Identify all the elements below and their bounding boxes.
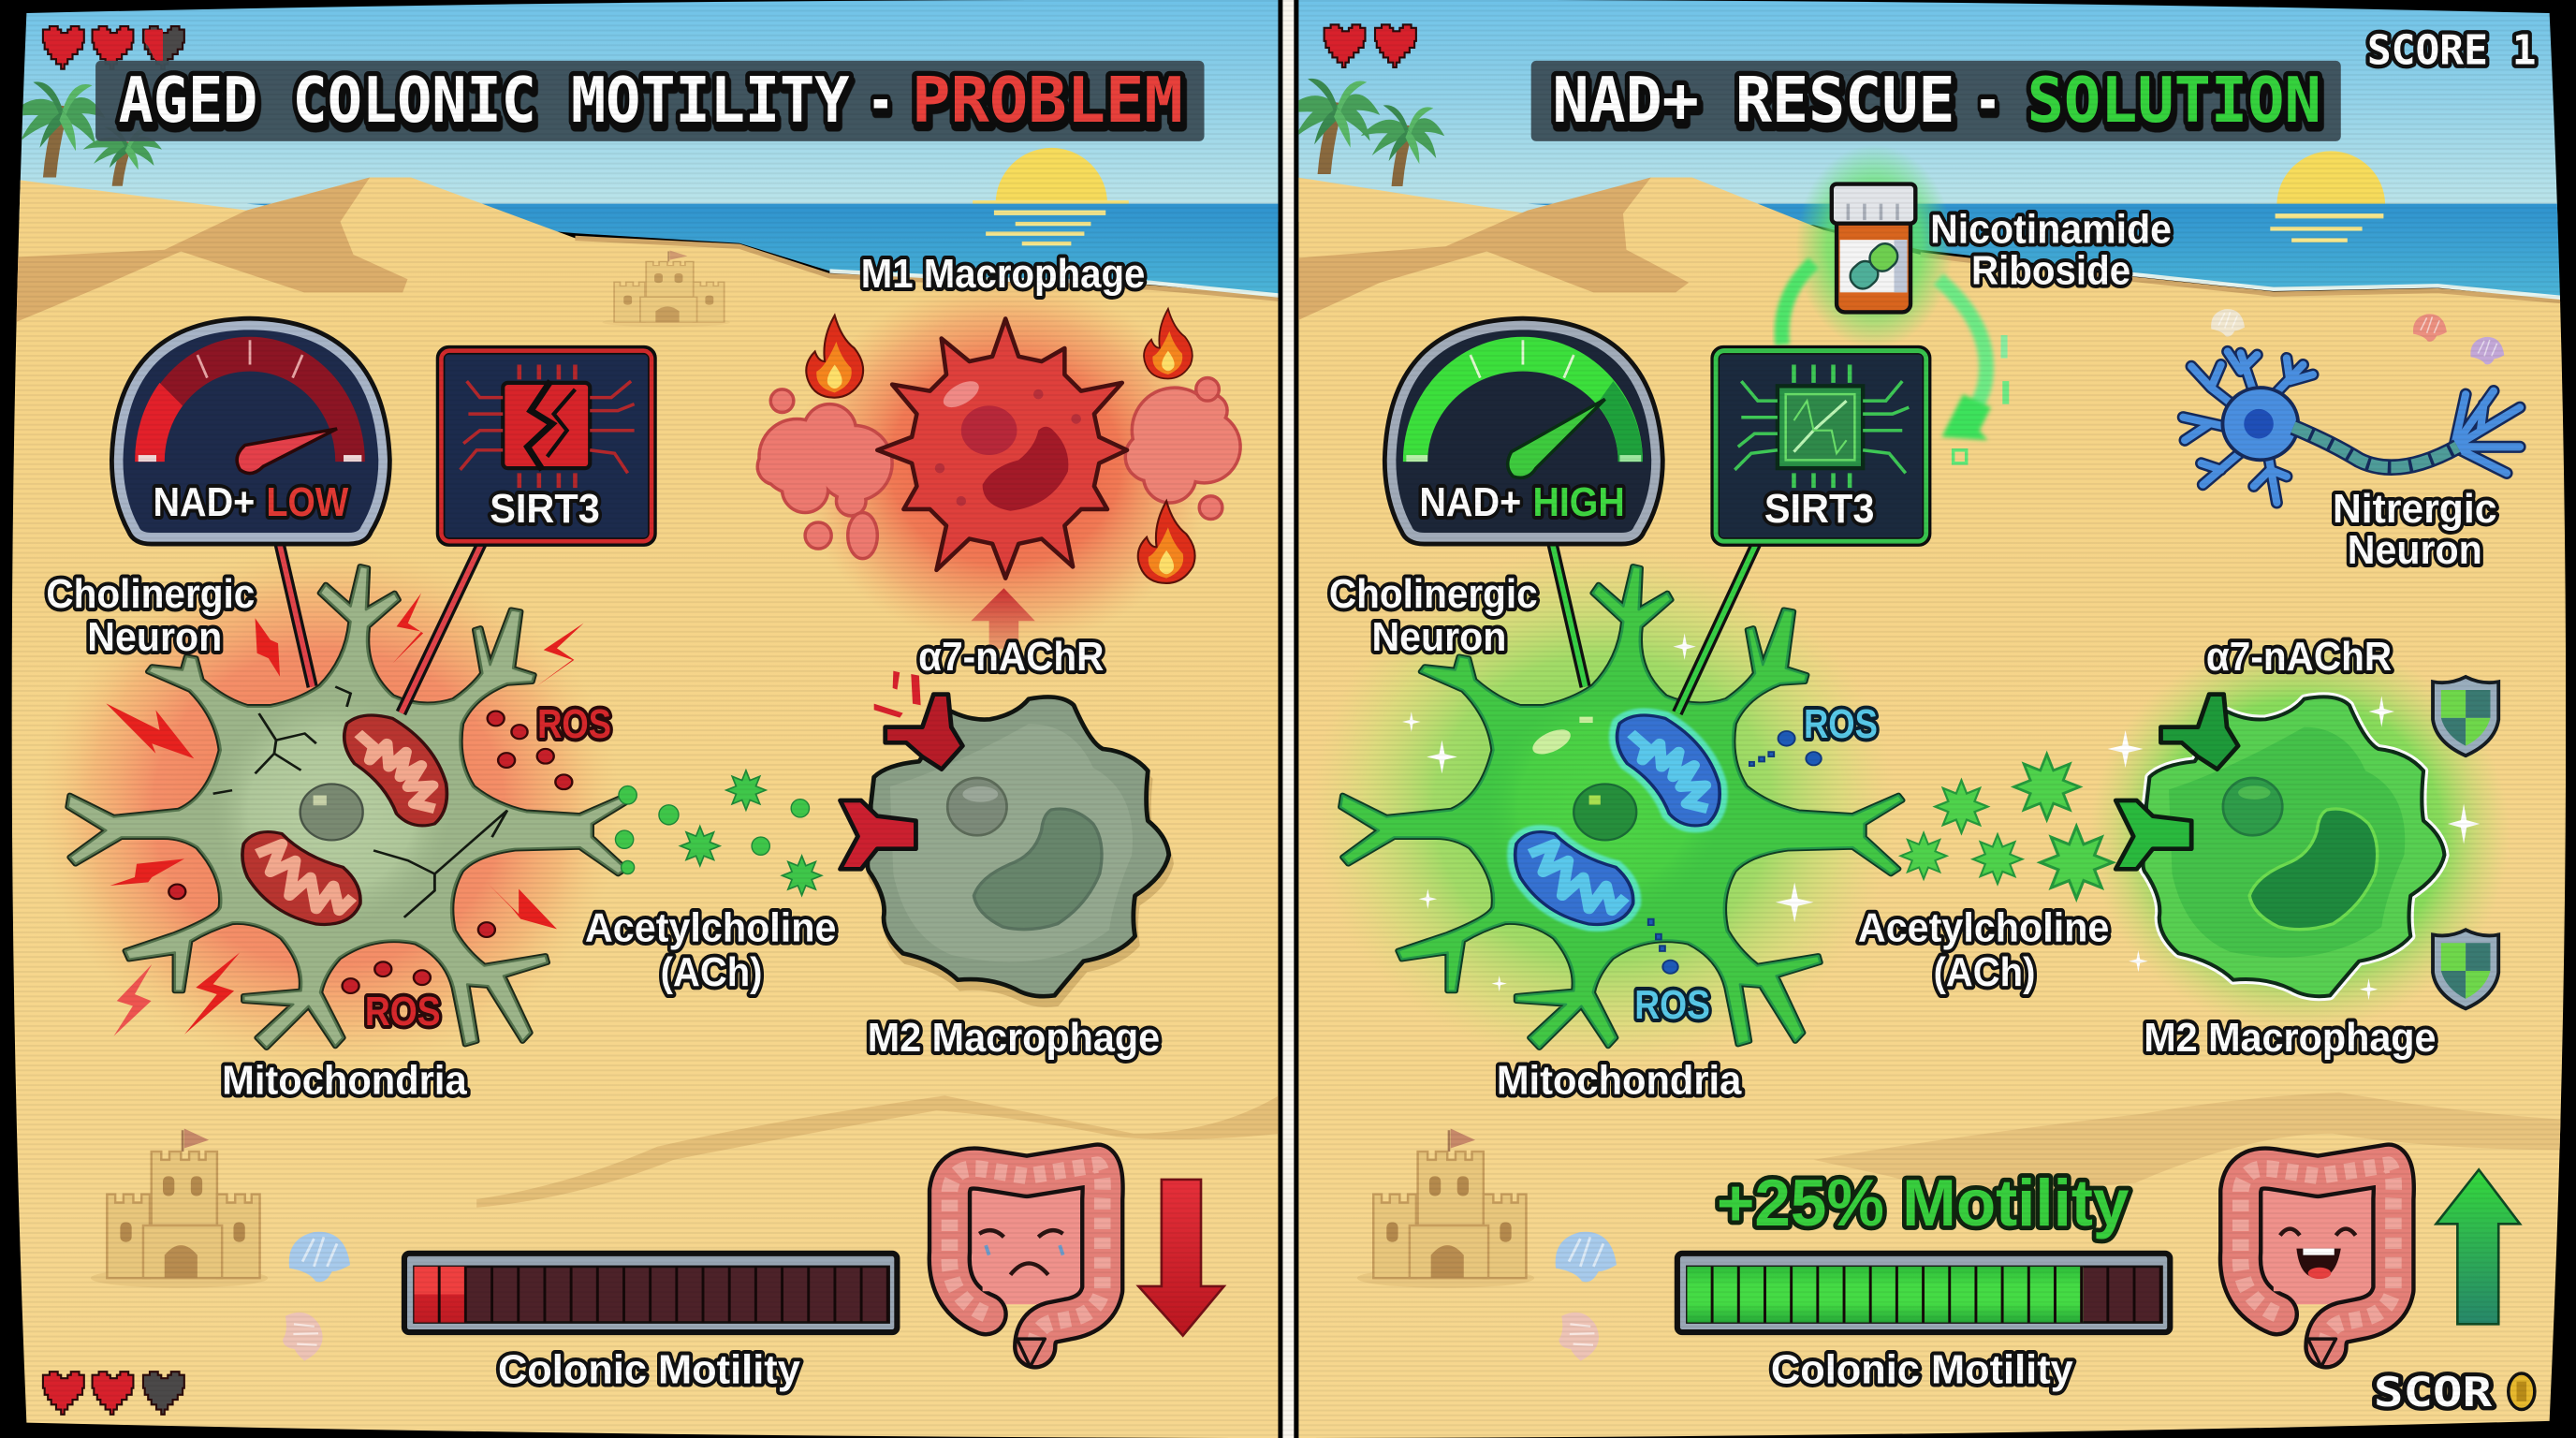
label: ROS upper: ROS — [1804, 701, 1878, 747]
soma — [2222, 388, 2298, 460]
swirl left — [1782, 263, 1814, 345]
healthy cholinergic neuron — [1340, 566, 1902, 1048]
connector: NAD+ gauge to neuron — [1553, 544, 1586, 686]
bar fill — [414, 1267, 467, 1323]
gauge text: NAD+ — [153, 479, 255, 525]
gauge: NAD+ low — [119, 325, 383, 537]
title text: NAD+ RESCUE — [1553, 64, 1954, 137]
M2 macrophage, healthy green — [2108, 695, 2480, 1000]
chip — [1778, 386, 1863, 468]
sandcastle — [91, 1128, 268, 1288]
colon tube — [2240, 1165, 2393, 1367]
gauge needle — [237, 429, 337, 474]
label: Cholinergic Neuron: Neuron — [87, 614, 222, 660]
gauge text — [153, 479, 349, 525]
label: Nitrergic Neuron: Nitrergic — [2333, 486, 2496, 532]
title text: AGED COLONIC MOTILITY — [119, 64, 849, 137]
label: M2 Macrophage: M2 Macrophage — [868, 1015, 1160, 1061]
cracks — [213, 686, 507, 917]
label: Colonic Motility: Colonic Motility — [1771, 1346, 2073, 1392]
gauge band — [1403, 337, 1643, 462]
cell body — [868, 697, 1171, 1005]
title text — [1553, 64, 2321, 137]
label: Nitrergic Neuron: Neuron — [2348, 527, 2482, 573]
title text: SOLUTION — [2027, 64, 2321, 137]
label: Mitochondria: Mitochondria — [222, 1058, 467, 1104]
shell: blue — [1556, 1232, 1617, 1282]
title bar: solution — [1531, 61, 2341, 141]
SIRT3 healthy chip card — [1715, 350, 1927, 542]
card — [1715, 350, 1927, 542]
sun — [973, 148, 1129, 204]
sand — [0, 178, 1281, 1438]
sparkles — [1402, 633, 1814, 991]
label: Colonic Motility: Colonic Motility — [498, 1346, 800, 1392]
hearts: top right panel — [1325, 24, 1416, 67]
hearts: bottom left — [43, 1372, 184, 1415]
broken chip — [503, 381, 590, 470]
colon face — [963, 1186, 1090, 1304]
neuron body — [1340, 566, 1902, 1048]
receptor top — [886, 695, 962, 770]
label: Nicotinamide Riboside — [1930, 207, 2172, 294]
mitochondrion lower — [1515, 832, 1633, 924]
lower dune streak — [476, 1094, 1281, 1208]
gauge rim — [119, 325, 383, 537]
lower dune — [1814, 1093, 2576, 1190]
M1 glow — [816, 292, 1200, 635]
ROS dots — [168, 712, 572, 993]
label: Cholinergic Neuron — [46, 571, 255, 660]
label: alpha7 receptor: α7-nAChR — [2206, 634, 2392, 680]
supplement bottle with swirl — [1782, 144, 2009, 463]
title text: PROBLEM — [912, 64, 1183, 137]
sand — [1298, 178, 2576, 1438]
label: Nicotinamide Riboside: Nicotinamide — [1930, 207, 2172, 253]
bar segments — [1687, 1267, 2162, 1323]
label: Acetylcholine — [585, 904, 836, 995]
gauge needle — [1508, 399, 1605, 477]
shoreline foam and wet sand — [1921, 255, 2576, 302]
neuron halo — [1311, 546, 1895, 1071]
panel: solution (right) — [1281, 0, 2576, 1438]
label: Acetylcholine: Acetylcholine — [585, 904, 836, 950]
label: Mitochondria: Mitochondria — [1497, 1058, 1742, 1104]
label: ROS lower: ROS — [1634, 982, 1710, 1028]
bar fill — [1687, 1267, 2083, 1323]
small distant sandcastle — [603, 251, 730, 327]
HUD: SCORE 1: SCORE 1 — [2367, 26, 2537, 74]
macrophage halo — [2089, 638, 2510, 1032]
bar frame — [1677, 1254, 2170, 1332]
neuron body — [68, 566, 630, 1048]
bottle body — [1837, 217, 1910, 312]
bottle cap — [1832, 184, 1915, 224]
gauge rim — [1392, 325, 1656, 537]
capsule — [1846, 239, 1902, 293]
acetylcholine particles — [615, 770, 822, 895]
receptor left — [841, 800, 915, 869]
colon tube — [949, 1165, 1103, 1367]
flames — [806, 309, 1195, 583]
nucleus — [300, 784, 363, 840]
label: alpha7 receptor: α7-nAChR — [918, 634, 1104, 680]
acetylcholine particles — [1901, 754, 2113, 899]
nucleolus — [2223, 778, 2282, 835]
sad colon — [949, 1165, 1103, 1367]
nucleus — [1573, 784, 1636, 840]
gauge band — [135, 337, 365, 462]
bar frame — [404, 1254, 897, 1332]
damaged cholinergic neuron — [68, 566, 630, 1048]
panel: problem (left) — [0, 0, 1281, 1438]
shield lower — [2433, 930, 2498, 1008]
lightning bolts — [106, 594, 584, 1036]
mitochondrion lower — [242, 832, 360, 924]
callout: +25% Motility: +25% Motility — [1717, 1166, 2129, 1240]
shield upper — [2433, 677, 2498, 756]
nucleus bean — [973, 809, 1102, 930]
axon myelin — [2293, 427, 2457, 467]
label: Nitrergic Neuron — [2333, 486, 2496, 573]
arrow: motility up — [2437, 1169, 2520, 1324]
sandcastle — [1357, 1128, 1534, 1288]
bar track — [414, 1267, 889, 1323]
HUD: coin — [2509, 1373, 2535, 1410]
gauge text: NAD+ — [1419, 479, 1521, 525]
sky — [0, 0, 1281, 222]
label: SIRT3: SIRT3 — [1764, 486, 1874, 532]
axon sheath — [2293, 427, 2457, 467]
receptor left — [2115, 800, 2191, 869]
label: Acetylcholine: (ACh) — [1934, 949, 2035, 995]
motility bar: high — [1677, 1254, 2170, 1332]
palm trees — [1281, 79, 1444, 186]
receptor sparks — [874, 671, 921, 718]
gauge text — [1419, 479, 1625, 525]
shell: pink — [1551, 1306, 1605, 1366]
label: ROS lower: ROS — [365, 989, 441, 1034]
centre divider — [1282, 0, 1294, 1438]
arrow: motility down — [1138, 1180, 1224, 1336]
connector: NAD+ gauge to neuron — [280, 544, 313, 686]
sad face — [979, 1230, 1063, 1275]
circuit traces — [461, 365, 635, 488]
dune shading — [0, 178, 407, 329]
dune shading — [1298, 178, 1689, 320]
sky — [1298, 0, 2576, 222]
swirl right with arrowhead — [1939, 279, 2009, 463]
title text: - — [1974, 64, 2001, 137]
label: Nicotinamide Riboside: Riboside — [1971, 248, 2130, 294]
gauge: NAD+ high — [1392, 325, 1656, 537]
shell: pink — [283, 1313, 322, 1361]
label: M2 Macrophage: M2 Macrophage — [2144, 1015, 2437, 1061]
M1 smoke clouds — [759, 378, 1238, 559]
label: Cholinergic Neuron — [1329, 571, 1538, 660]
title background — [1531, 61, 2341, 141]
label: Acetylcholine: (ACh) — [661, 949, 762, 995]
membrane highlight — [1528, 717, 1593, 759]
sea — [247, 204, 1281, 296]
ROS dots — [1648, 731, 1822, 974]
bottle glow — [1795, 144, 1954, 348]
neuron halo — [61, 568, 597, 1049]
arrow: M2 to M1 — [971, 588, 1035, 649]
HUD: clipped score: SCOR — [2374, 1369, 2493, 1416]
label: Acetylcholine: Acetylcholine — [1858, 904, 2109, 950]
gauge text: HIGH — [1532, 479, 1625, 525]
hearts: top left — [43, 26, 184, 69]
M2 macrophage, grey — [841, 671, 1171, 1005]
sparkles — [2108, 696, 2480, 1000]
label: Cholinergic Neuron: Cholinergic — [46, 571, 255, 617]
dendrites — [2183, 352, 2520, 503]
label: Cholinergic Neuron: Cholinergic — [1329, 571, 1538, 617]
mitochondrion upper — [344, 715, 446, 826]
shell: blue — [289, 1232, 350, 1282]
bar segments — [414, 1267, 889, 1323]
title background — [95, 61, 1205, 141]
bar track — [1687, 1267, 2162, 1323]
card border — [441, 351, 651, 541]
label: M1 Macrophage: M1 Macrophage — [861, 251, 1145, 297]
connector: SIRT3 to mitochondria — [1677, 544, 1756, 713]
palm trees — [7, 81, 162, 186]
gauge text: LOW — [267, 479, 349, 525]
shells: beach scatter — [2211, 309, 2504, 364]
card — [441, 350, 652, 542]
M1 macrophage spiky cell — [877, 318, 1127, 579]
sun — [2254, 151, 2409, 259]
dendrite fill — [2183, 352, 2520, 503]
colon face — [2254, 1186, 2382, 1304]
label: ROS upper: ROS — [537, 701, 611, 747]
title text: - — [868, 64, 894, 137]
nucleus bean — [2249, 809, 2378, 930]
happy colon — [2240, 1165, 2393, 1367]
circuit traces — [1734, 365, 1909, 488]
nitrergic neuron — [2183, 352, 2520, 503]
shoreline foam and wet sand — [575, 238, 1281, 299]
label: Cholinergic Neuron: Neuron — [1371, 614, 1506, 660]
cell body — [2144, 697, 2444, 996]
connector: SIRT3 to mitochondria — [401, 544, 481, 713]
receptor top — [2160, 695, 2238, 770]
label: Acetylcholine — [1858, 904, 2109, 995]
nucleolus — [947, 778, 1007, 835]
mitochondrion upper — [1617, 715, 1720, 826]
SIRT3 damaged chip card — [441, 350, 652, 542]
happy face — [2280, 1229, 2356, 1279]
title bar: problem — [95, 61, 1205, 141]
sea — [1528, 204, 2576, 299]
motility bar: low — [404, 1254, 897, 1332]
label: SIRT3: SIRT3 — [490, 486, 600, 532]
card border — [1716, 351, 1926, 541]
